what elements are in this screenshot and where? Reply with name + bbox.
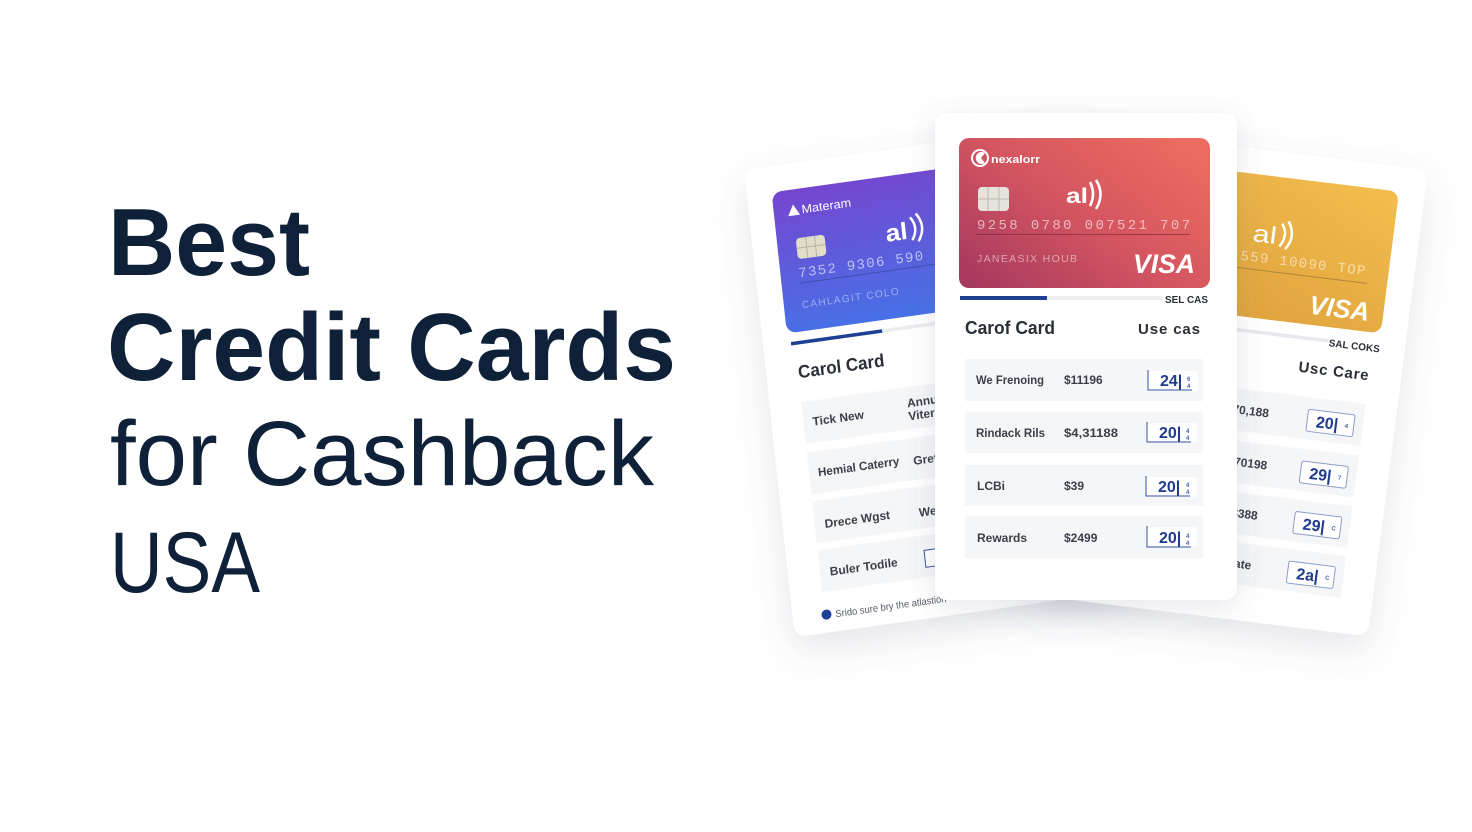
title: USA [110, 515, 261, 611]
row: Rewards: $2499 [1064, 531, 1098, 545]
left credit card: Materam [801, 195, 852, 216]
icon: issuer logo: nexalorr [991, 154, 1041, 166]
right badges [1286, 409, 1355, 589]
left credit card: 7352 9306 590 9 [798, 246, 945, 282]
right rows: $70,188 [1225, 401, 1270, 420]
row: Rewards: 4 [1186, 534, 1190, 540]
right badges: C [1331, 526, 1337, 533]
right credit card [1132, 161, 1399, 333]
right rows: Rate [1225, 555, 1252, 572]
row: LCBi [965, 465, 1203, 506]
right card heading: Usc Care [1297, 359, 1370, 384]
right badges: 29| [1308, 466, 1332, 485]
left rows: Tick New [812, 407, 865, 429]
icon: contactless: al [1066, 185, 1088, 208]
row: Rewards: Rewards [977, 531, 1027, 545]
left rows: Hemial Caterry [817, 454, 900, 479]
icon: visa mark: VISA [1133, 249, 1195, 279]
panel: right card [1026, 128, 1428, 636]
right badges: 2a| [1295, 566, 1319, 586]
row: Rewards: 4 [1186, 541, 1190, 547]
left rows: Annu [906, 392, 938, 410]
center progress bar [960, 296, 1162, 300]
center card heading: Carof Card [965, 318, 1055, 338]
row: We Frenoing: We Frenoing [976, 373, 1044, 387]
right badges: 7 [1338, 475, 1342, 482]
row: We Frenoing: $11196 [1064, 373, 1103, 387]
left rows: We [918, 503, 938, 520]
right credit card: al [1251, 220, 1278, 250]
center credit card [959, 138, 1210, 288]
row: LCBi: LCBi [977, 479, 1005, 493]
left rows [801, 368, 1065, 592]
right credit card: VISA [1307, 290, 1371, 327]
row: We Frenoing: 6 [1187, 377, 1191, 383]
left rows: Viter [908, 406, 936, 423]
title: Best [108, 189, 310, 296]
left rows: Drece Wgst [824, 508, 891, 531]
right rows: $388 [1230, 506, 1259, 523]
panel: left card [744, 122, 1136, 637]
title [107, 189, 676, 611]
card number: 9258 0780 007521 707 [977, 218, 1190, 234]
left credit card: CAHLAGIT COLO [801, 286, 901, 311]
left rows: Buler Todile [829, 555, 899, 579]
right progress bar [1132, 315, 1329, 343]
center bar label: SEL CAS [1165, 295, 1208, 306]
right badges: C [1325, 576, 1330, 582]
left progress bar [791, 307, 1039, 346]
center card side heading: Use cas [1138, 321, 1200, 338]
right badges: 20| [1315, 414, 1339, 434]
icon: chip [978, 187, 1009, 211]
row: LCBi: $39 [1064, 479, 1084, 493]
icon: contactless [1066, 180, 1100, 209]
row: LCBi: 20| [1158, 479, 1180, 496]
left footnote: Srido sure bry the atlastion [835, 594, 947, 620]
right rows [1098, 374, 1366, 598]
row: LCBi: 4 [1186, 483, 1190, 489]
row: Rindack Rils: 4 [1186, 429, 1190, 435]
left card heading: Carol Card [797, 350, 885, 382]
left credit card [772, 157, 1035, 334]
title: for Cashback [110, 403, 655, 505]
right rows: $70198 [1227, 454, 1268, 473]
row: We Frenoing: 24| [1160, 373, 1182, 390]
cardholder name: JANEASIX HOUB [977, 253, 1077, 265]
row: Rindack Rils [965, 412, 1203, 453]
left credit card: al [884, 218, 909, 248]
row: Rindack Rils: 20| [1159, 425, 1181, 442]
right bar label: SAL COKS [1328, 338, 1381, 355]
icon: issuer logo [972, 150, 1041, 166]
row: Rindack Rils: $4,31188 [1064, 426, 1118, 440]
row: LCBi: 4 [1186, 490, 1190, 496]
row: Rindack Rils: Rindack Rils [976, 426, 1045, 440]
row: We Frenoing [965, 359, 1203, 401]
panel: center card [935, 113, 1237, 600]
row: We Frenoing: 4 [1187, 384, 1191, 390]
row: Rindack Rils: 4 [1186, 436, 1190, 442]
title: Credit Cards [107, 294, 676, 401]
row: Rewards [965, 516, 1203, 558]
right credit card: 559 10090 TOP [1239, 249, 1368, 280]
right badges: 29| [1302, 516, 1326, 536]
right badges: 4 [1344, 424, 1349, 430]
left rows: Gret [913, 451, 938, 468]
row: Rewards: 20| [1159, 530, 1181, 547]
